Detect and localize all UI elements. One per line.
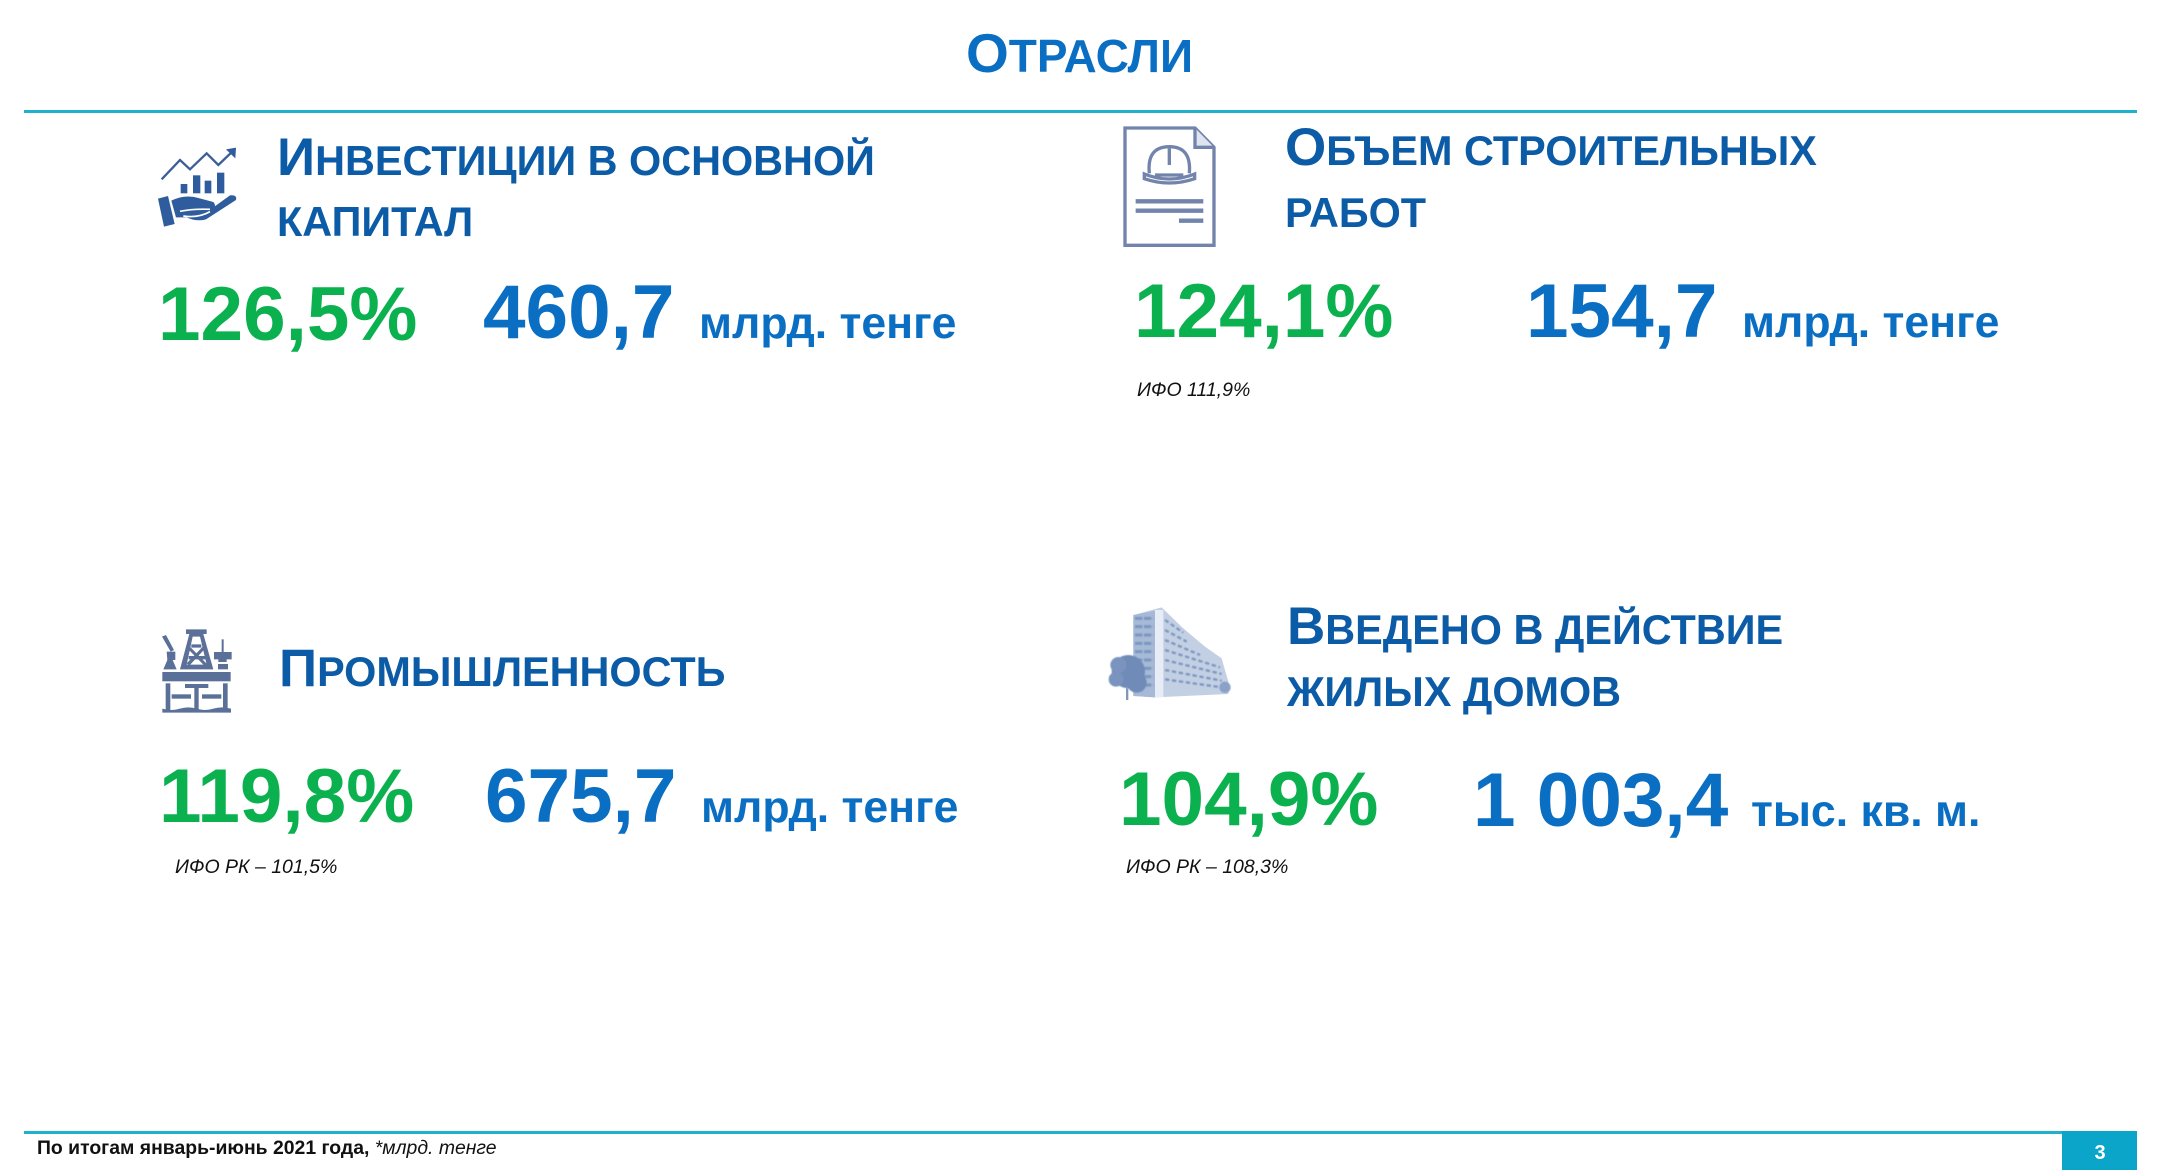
heading: РАБОТ: [1285, 190, 1426, 236]
volume value: 154,7: [1526, 269, 1717, 354]
volume unit: млрд. тенге: [1742, 298, 1999, 347]
volume unit: млрд. тенге: [701, 783, 958, 832]
volume value: 675,7: [485, 754, 676, 839]
icon: apartment building: [1109, 607, 1231, 700]
icon: oil platform: [162, 629, 232, 713]
physical volume index: ИФО 111,9%: [1137, 379, 1250, 401]
physical volume index: ИФО РК – 108,3%: [1126, 856, 1288, 878]
page number: [2062, 1131, 2137, 1170]
icon: document with helmet: [1125, 128, 1214, 245]
volume value: 460,7: [483, 270, 674, 355]
volume unit: тыс. кв. м.: [1751, 787, 1980, 836]
footnote: По итогам январь-июнь 2021 года, *млрд. тенге: [37, 1137, 497, 1159]
growth percentage: 119,8%: [159, 754, 414, 839]
growth percentage: 104,9%: [1119, 757, 1378, 842]
panel: housing: [1109, 597, 1980, 878]
heading: ЖИЛЫХ ДОМОВ: [1286, 669, 1621, 715]
page number: 3: [2094, 1142, 2106, 1164]
heading: ИНВЕСТИЦИИ В ОСНОВНОЙ: [277, 128, 875, 187]
panel: construction: [1125, 118, 1999, 401]
growth percentage: 126,5%: [158, 272, 417, 357]
heading: ПРОМЫШЛЕННОСТЬ: [279, 639, 725, 698]
heading: ВВЕДЕНО В ДЕЙСТВИЕ: [1287, 597, 1783, 656]
panel: industry: [159, 629, 958, 878]
heading: ОБЪЕМ СТРОИТЕЛЬНЫХ: [1285, 118, 1817, 177]
title: ОТРАСЛИ: [966, 22, 1193, 84]
volume value: 1 003,4: [1473, 758, 1729, 843]
physical volume index: ИФО РК – 101,5%: [175, 856, 337, 878]
heading: КАПИТАЛ: [277, 199, 473, 245]
volume unit: млрд. тенге: [699, 299, 956, 348]
panel: investments: [158, 128, 956, 357]
icon: hand with chart: [158, 148, 236, 227]
growth percentage: 124,1%: [1134, 269, 1393, 354]
